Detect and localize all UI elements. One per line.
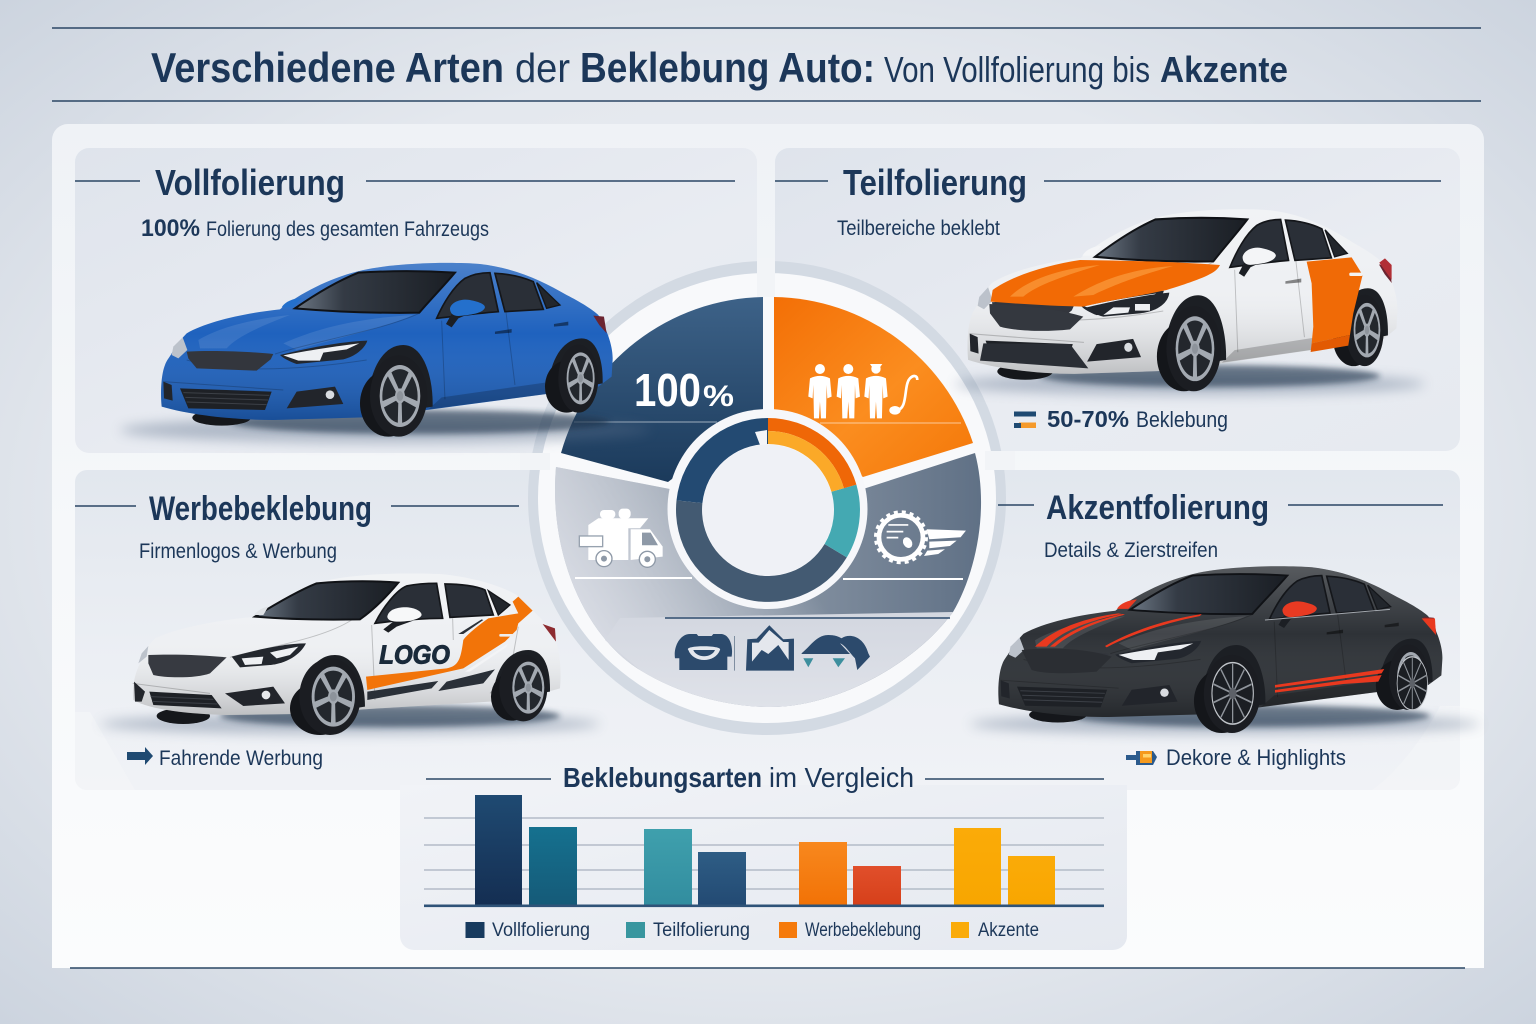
title: der — [515, 45, 570, 91]
chart heading — [563, 762, 914, 793]
title: Akzente — [1160, 49, 1288, 90]
heading: Teilfolierung: Teilfolierung — [843, 162, 1027, 203]
callout: Dekore & Highlights: Dekore & Highlights — [1166, 745, 1346, 770]
heading: Werbebeklebung: Werbebeklebung — [149, 490, 372, 528]
slice: Teilfolierung — [774, 297, 973, 477]
legend: Werbebeklebung — [805, 920, 921, 941]
stat: 50-70% Beklebung: Beklebung — [1136, 407, 1228, 432]
title: Verschiedene Arten — [151, 44, 504, 91]
slice: Werbung and Akzent — [555, 453, 981, 707]
callout: Fahrende Werbung: Fahrende Werbung — [159, 747, 323, 770]
car: advertising wrap: LOGO — [379, 639, 450, 669]
icon: gear wing — [876, 512, 966, 563]
panel: bar chart backdrop — [400, 785, 1127, 950]
heading: Akzentfolierung: Akzentfolierung — [1046, 489, 1269, 527]
panel: Vollfolierung — [75, 162, 735, 443]
title: Beklebung Auto: — [580, 44, 875, 91]
subtitle: Details: Details & Zierstreifen — [1044, 539, 1218, 562]
icon: coverage bars — [1014, 412, 1036, 428]
icons: bottom row — [675, 625, 870, 671]
panel background: Werbebeklebung and Akzentfolierung band — [75, 470, 1460, 790]
subtitle: Firmenlogos: Firmenlogos & Werbung — [139, 540, 337, 563]
chart heading: Beklebungsarten — [563, 762, 762, 793]
icon: decor — [1126, 751, 1157, 765]
title — [151, 44, 1288, 91]
icon: people and note — [808, 364, 917, 418]
panel: Teilfolierung — [775, 162, 1441, 432]
subtitle: 100% Folierung — [141, 215, 489, 242]
legend — [466, 920, 1039, 941]
stat: 50-70% Beklebung: 50-70% — [1047, 406, 1129, 432]
subtitle: 100% Folierung: 100% — [141, 215, 200, 242]
heading: Vollfolierung: Vollfolierung — [155, 162, 345, 203]
icon: arrow — [127, 747, 153, 765]
stat: 50-70% Beklebung — [1014, 406, 1228, 432]
central pie infographic — [520, 258, 1015, 735]
bar chart comparison — [424, 762, 1104, 941]
main content card — [52, 124, 1484, 968]
panel background: Vollfolierung — [75, 148, 757, 453]
panel: Akzentfolierung — [970, 489, 1480, 770]
panel background: Teilfolierung — [775, 148, 1460, 451]
legend: Teilfolierung — [653, 920, 750, 941]
slice: Vollfolierung — [561, 297, 763, 482]
chart heading: im Vergleich — [769, 762, 914, 793]
car: blue full wrap — [120, 263, 650, 443]
title: Von Vollfolierung bis — [884, 49, 1150, 90]
car: advertising wrap — [100, 573, 600, 735]
donut ring — [668, 409, 868, 609]
subtitle: 100% Folierung: Folierung des gesamten Fahrzeugs — [206, 218, 489, 241]
car: accent stripes — [970, 566, 1480, 734]
subtitle: Teilbereiche: Teilbereiche beklebt — [837, 217, 1000, 240]
icon: truck — [579, 509, 663, 567]
legend: Akzente — [978, 920, 1039, 941]
car: partial orange wrap — [955, 209, 1425, 395]
100% label: % — [703, 380, 734, 413]
100% label: 100 — [634, 364, 701, 416]
legend: Vollfolierung — [492, 920, 590, 941]
bars — [475, 795, 1055, 905]
panel: Werbebeklebung — [75, 490, 600, 770]
